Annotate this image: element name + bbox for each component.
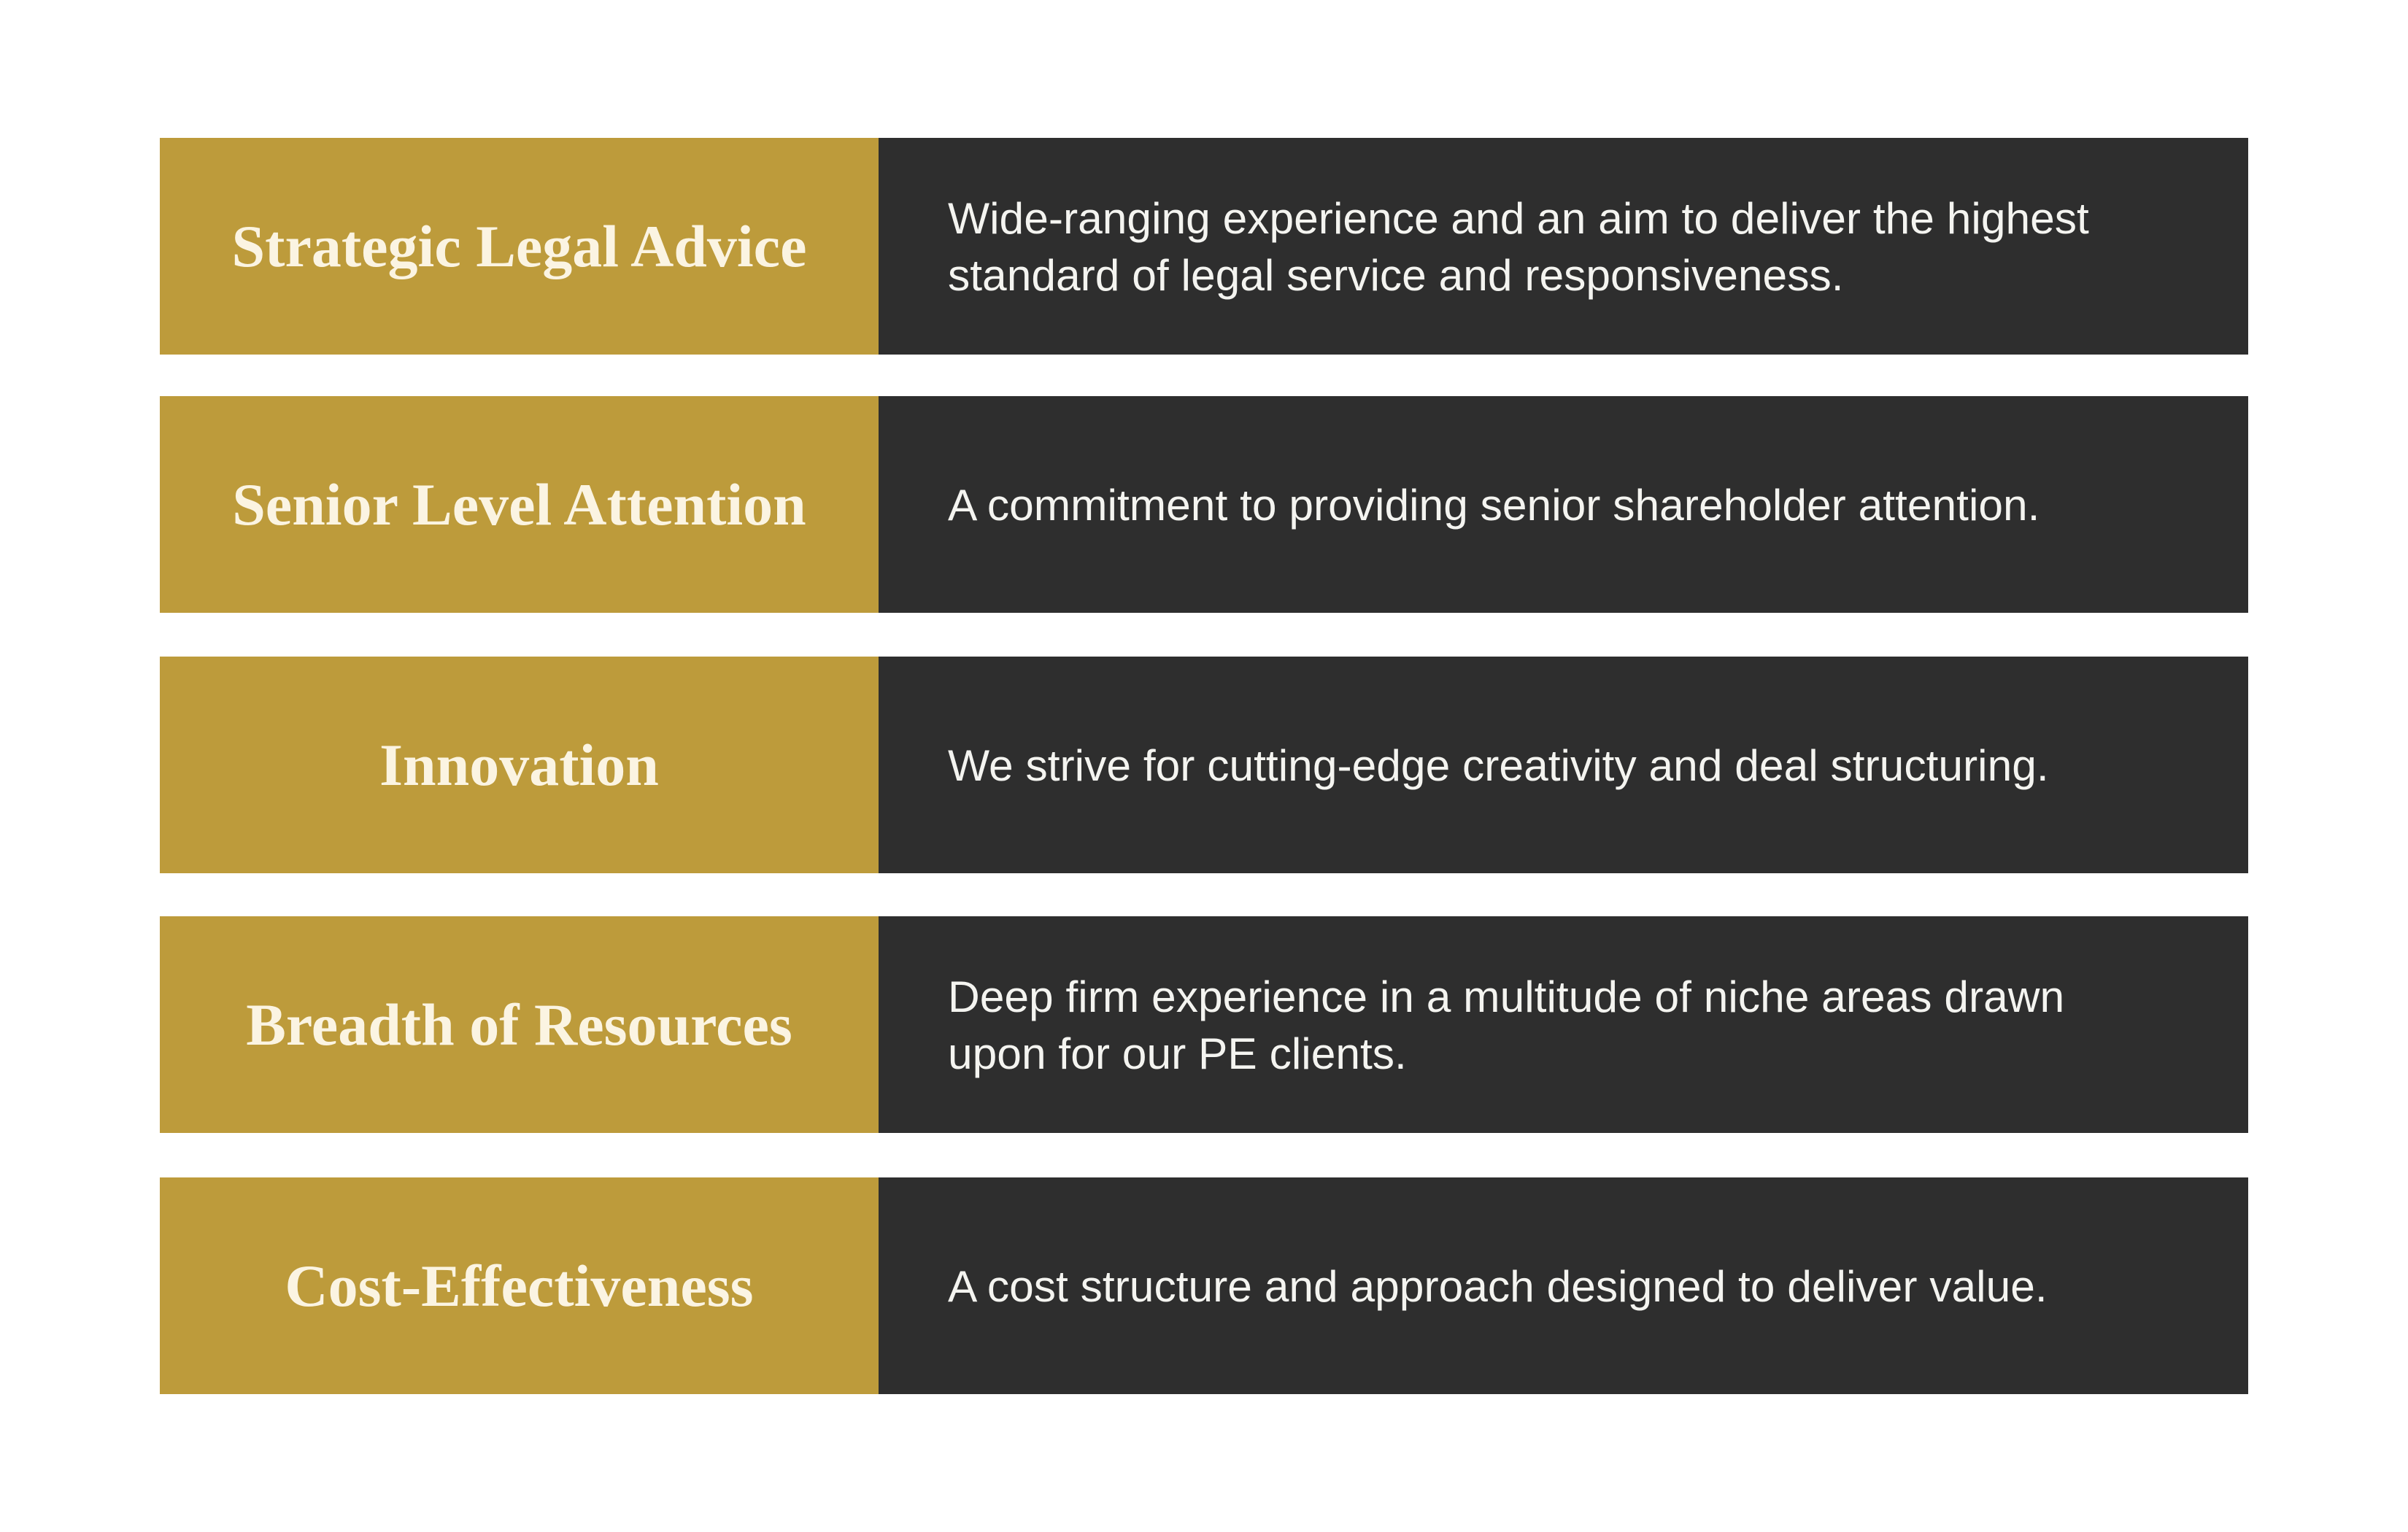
text block: senior description xyxy=(879,396,2248,613)
text block: innovation description xyxy=(879,657,2248,873)
row: Innovation xyxy=(160,657,2248,873)
heading: Senior Level Attention: Senior Level Attention xyxy=(232,471,806,537)
row: Cost-Effectiveness xyxy=(160,1177,2248,1394)
heading: Strategic Legal Advice: Strategic Legal Advice xyxy=(232,213,806,279)
text block: cost description: A cost structure and approach designed to deliver value. xyxy=(948,1261,2048,1310)
heading: Strategic Legal Advice xyxy=(160,138,879,355)
text block: breadth description: Deep firm experience in a multitude of niche areas drawn xyxy=(948,972,2064,1021)
text block: strategic description: Wide-ranging experience and an aim to deliver the highest xyxy=(948,193,2089,242)
text block: innovation description: We strive for cutting-edge creativity and deal structuring. xyxy=(948,740,2049,789)
heading: Innovation: Innovation xyxy=(379,731,659,798)
heading: Breadth of Resources xyxy=(160,916,879,1133)
text block: breadth description xyxy=(879,916,2248,1133)
row: Senior Level Attention xyxy=(160,396,2248,613)
row: Breadth of Resources xyxy=(160,916,2248,1133)
heading: Cost-Effectiveness: Cost-Effectiveness xyxy=(285,1252,754,1319)
text block: breadth description: upon for our PE clients. xyxy=(948,1029,1407,1078)
row: Strategic Legal Advice xyxy=(160,138,2248,355)
heading: Breadth of Resources: Breadth of Resources xyxy=(246,991,792,1058)
text block: cost description xyxy=(879,1177,2248,1394)
heading: Senior Level Attention xyxy=(160,396,879,613)
text block: senior description: A commitment to providing senior shareholder attention. xyxy=(948,480,2040,530)
text block: strategic description xyxy=(879,138,2248,355)
heading: Cost-Effectiveness xyxy=(160,1177,879,1394)
text block: strategic description: standard of legal service and responsiveness. xyxy=(948,249,1844,299)
heading: Innovation xyxy=(160,657,879,873)
